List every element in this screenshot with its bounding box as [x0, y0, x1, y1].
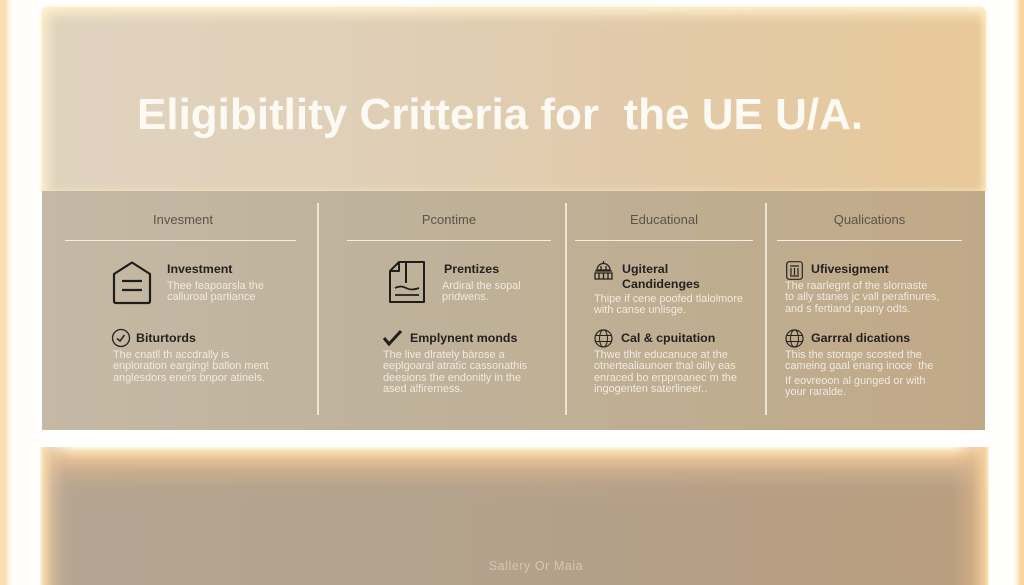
item text: employment: eeplgoaral atratic cassonathis [383, 360, 527, 372]
item text: biturtords [113, 349, 269, 384]
item text: garrral dications [785, 349, 933, 372]
item title: investment: Investment [167, 262, 232, 276]
item text: prentizes [442, 280, 521, 303]
column divider [765, 203, 767, 415]
column heading: pcontime: Pcontime [422, 212, 476, 227]
item note: garrral dications [785, 375, 925, 398]
item text: garrral dications: This the storage scosted the [785, 349, 922, 361]
item text: biturtords: The cnatll th accdrally is [113, 349, 229, 361]
item note: garrral dications: If eovreoon al gunged or with [785, 375, 925, 387]
icon: globe [594, 329, 613, 348]
item text: ufivesigment: and s fertiand apany odts. [785, 303, 910, 315]
item title: ugiteral candidenges [622, 262, 700, 291]
icon: check circle [112, 328, 130, 348]
item note: garrral dications: your raralde. [785, 386, 846, 398]
item text: employment [383, 349, 527, 395]
item title: ufivesigment: Ufivesigment [811, 262, 889, 276]
criteria table panel [42, 191, 985, 430]
item text: cal and cpuitation: otnertealiaunoer thal oilly eas [594, 360, 736, 372]
column heading: qualications: Qualications [834, 212, 905, 227]
item title: biturtords: Biturtords [136, 331, 196, 345]
item text: ugiteral: with canse unlisge. [594, 304, 686, 316]
item text: employment: ased alfirerness. [383, 383, 463, 395]
icon: house document [112, 261, 152, 304]
item text: employment: The live dlrately bàrose a [383, 349, 505, 361]
item text: cal and cpuitation: ingogenten saterlineer.. [594, 383, 707, 395]
column heading: investment: Invesment [153, 212, 213, 227]
item text: cal and cpuitation [594, 349, 737, 395]
item text: biturtords: anglesdors eners bnpor atinels. [113, 372, 265, 384]
title: Eligibitlity Critteria for the UE U/A. [137, 90, 863, 139]
panel: prentizes column [347, 212, 551, 395]
item text: prentizes: pridwens. [442, 291, 489, 303]
icon: check pencil [383, 330, 402, 346]
icon: framed columns [786, 261, 803, 280]
item text: ufivesigment: to ally stanes jc vall perafinures, [785, 291, 939, 303]
top background panel [42, 7, 986, 191]
column divider [565, 203, 567, 415]
panel: educational column [575, 212, 753, 395]
item text: biturtords: enploration earging! ballon ment [113, 360, 269, 372]
panel: investment column [65, 212, 296, 384]
icon: domed building [594, 261, 613, 280]
column heading: educational: Educational [630, 212, 698, 227]
item text: employment: deesions the endonitly in the [383, 372, 521, 384]
item text: ufivesigment [785, 280, 939, 315]
item title: cal and cpuitation: Cal & cpuitation [621, 331, 715, 345]
item text: garrral dications: cameing gaal enang inoce the [785, 360, 933, 372]
item text: ugiteral: Thipe if cene poofed tlalolmore [594, 293, 743, 305]
bottom reflection panel [40, 447, 989, 585]
icon: open document [389, 261, 425, 303]
item title: garrral dications: Garrral dications [811, 331, 910, 345]
item title: employment: Emplynent monds [410, 331, 517, 345]
item text: cal and cpuitation: enraced bo erpproanec m the [594, 372, 737, 384]
item text: investment: calluroal partiance [167, 291, 255, 303]
footer caption: Sallery Or Maia [489, 559, 583, 573]
item title: ugiteral candidenges: Candidenges [622, 277, 700, 291]
panel: qualifications column [777, 212, 962, 398]
item text: investment [167, 280, 264, 303]
item title: ugiteral candidenges: Ugiteral [622, 262, 668, 276]
item text: ugiteral [594, 293, 743, 316]
item text: investment: Thee feapoarsla the [167, 280, 264, 292]
icon: globe grid [785, 329, 804, 348]
column divider [317, 203, 319, 415]
item text: prentizes: Ardiral the sopal [442, 280, 521, 292]
item text: cal and cpuitation: Thwe tlhlr educanuce at the [594, 349, 728, 361]
item title: prentizes: Prentizes [444, 262, 499, 276]
item text: ufivesigment: The raarlegnt of the slornaste [785, 280, 927, 292]
